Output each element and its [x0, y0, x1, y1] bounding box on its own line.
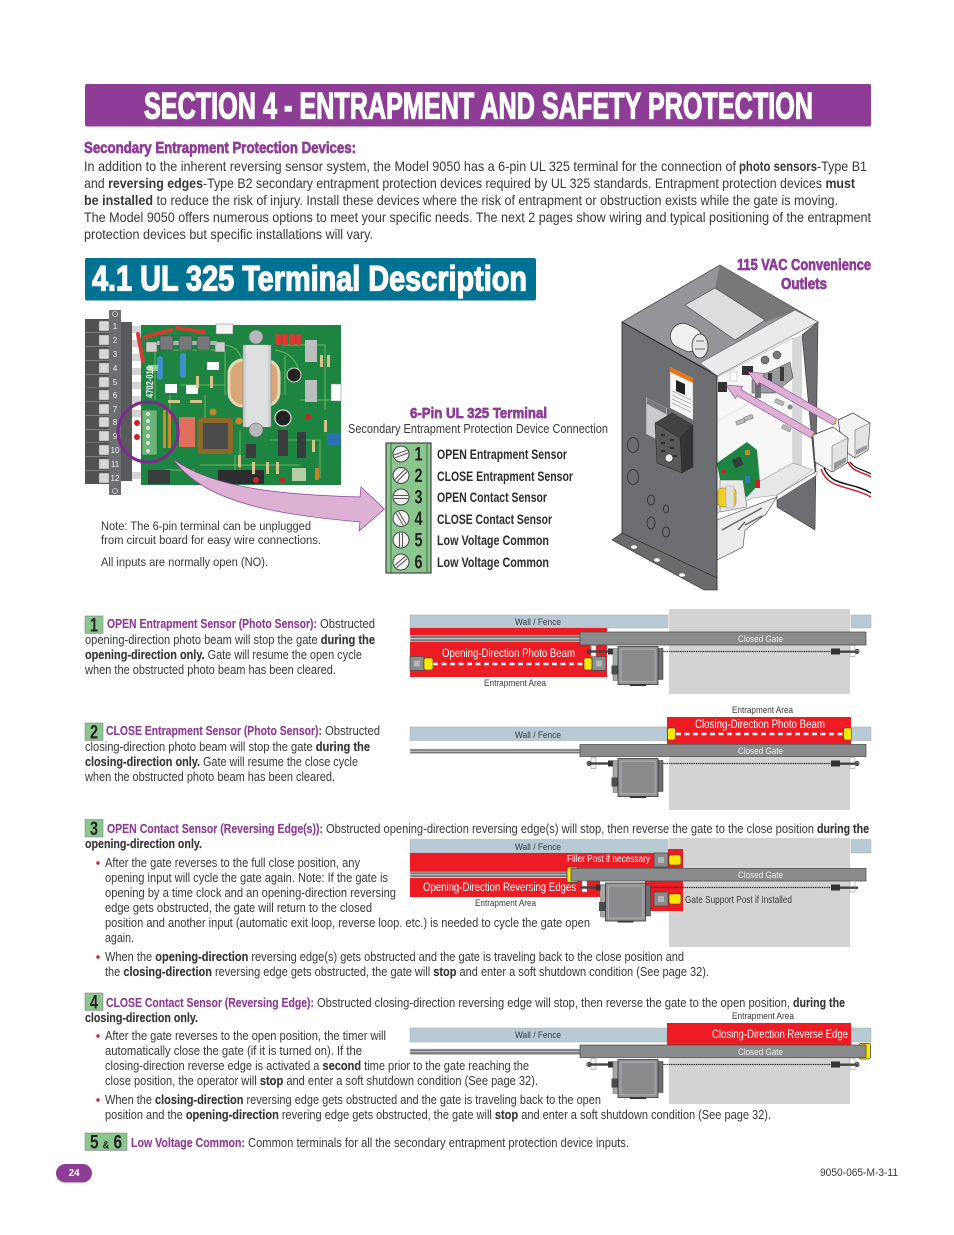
terminal labels: OPEN Contact Sensor — [437, 489, 547, 505]
entrapment area label: Entrapment Area — [475, 898, 537, 909]
section 4: close contact sensor text: position and the opening-direction revering edge gets obstructed, the gate will stop and enter a soft shutdown condition (See page 32). — [105, 1108, 771, 1122]
intro text block: protection devices but specific installations will vary. — [84, 226, 373, 242]
wall / fence — [410, 840, 871, 853]
interior white panel — [717, 338, 793, 505]
badge 1 — [85, 616, 103, 636]
note text: from circuit board for easy wire connections. — [101, 533, 321, 547]
section 3: open contact sensor text: opening input will cycle the gate again. Note: If the gate is — [105, 871, 388, 885]
badge 2 — [85, 722, 103, 744]
filler post and sensor — [654, 853, 681, 867]
badge 4: 4 — [90, 992, 98, 1014]
section 2: close entrapment sensor text: closing-direction photo beam will stop the gate during the — [85, 740, 370, 754]
wall / fence: Wall / Fence — [515, 730, 561, 741]
capacitors and resistors — [138, 324, 341, 401]
top beam — [700, 310, 818, 376]
6-pin terminal block — [386, 443, 431, 574]
badge 3: 3 — [90, 819, 98, 840]
right side panel — [777, 322, 818, 530]
badge 1: 1 — [90, 616, 98, 636]
section 3: open contact sensor text: opening-direction only. — [85, 837, 202, 851]
section 3: open contact sensor text: Obstructed opening-direction reversing edge(s) will stop, then reverse the gate to the close position — [326, 822, 814, 836]
note text — [101, 519, 321, 569]
section 2: close entrapment sensor text: Obstructed — [325, 724, 380, 738]
section 3: open contact sensor text: edge gets obstructed, the gate will return to the closed — [105, 901, 372, 915]
intro text block: -Type B1 — [817, 158, 867, 174]
support post and sensor — [654, 892, 681, 906]
reversing edge — [859, 1044, 870, 1059]
wall / fence — [410, 727, 871, 741]
heading: 115 VAC convenience outlets: 115 VAC Convenience — [737, 257, 871, 274]
section 3: open contact sensor text: during the — [817, 822, 869, 836]
terminal labels: CLOSE Contact Sensor — [437, 511, 552, 527]
section 4: close contact sensor text: during the — [793, 996, 845, 1010]
section 5 and 6: low voltage common: Common terminals for all the secondary entrapment protection device inputs. — [248, 1136, 629, 1150]
left side panel — [622, 322, 717, 590]
section 3: open contact sensor text: again. — [105, 931, 134, 945]
section 2: close entrapment sensor text — [84, 722, 380, 784]
capacitors and resistors: 4702-010 — [145, 366, 156, 398]
reversing edges label: Opening-Direction Reversing Edges — [423, 882, 576, 894]
section 4: close contact sensor text: CLOSE Contact Sensor (Reversing Edge): — [106, 996, 314, 1010]
section 3: open contact sensor text: opening by a time clock and an opening-direction reversing — [105, 886, 396, 900]
photo sensors — [668, 728, 852, 740]
closed gate — [571, 868, 866, 881]
diagram 2: closing-direction photo beam — [410, 705, 871, 810]
entrapment area label: Entrapment Area — [732, 705, 794, 716]
operator and chain — [580, 881, 858, 922]
terminal strip with 12 positions: 11 — [111, 460, 120, 469]
note text: All inputs are normally open (NO). — [101, 555, 268, 569]
section 4: close contact sensor text: After the gate reverses to the open position, the timer will — [105, 1029, 386, 1043]
terminal strip with 12 positions: 5 — [113, 378, 118, 387]
transformer — [229, 330, 279, 437]
beam label: Opening-Direction Photo Beam — [442, 648, 575, 660]
large capacitors and components — [148, 340, 341, 484]
6-pin terminal block: 4 — [414, 509, 423, 530]
knockout holes — [628, 438, 670, 537]
section 4: close contact sensor text: closing-direction reverse edge is activated a second time prior to the gate reaching the — [105, 1059, 529, 1073]
section 2: close entrapment sensor text: CLOSE Entrapment Sensor (Photo Sensor): — [106, 724, 322, 738]
green board — [141, 325, 341, 485]
section 1: open entrapment sensor text: when the obstructed photo beam has been cleared. — [84, 663, 336, 677]
section 4: close contact sensor text: When the closing-direction reversing edge gets obstructed and the gate is traveling back to the open — [105, 1093, 601, 1107]
section 2: close entrapment sensor text: closing-direction only. Gate will resume the close cycle — [85, 755, 358, 769]
reversing edge — [567, 867, 578, 882]
page number: 24 — [68, 1168, 80, 1179]
6-pin terminal block: 2 — [414, 466, 422, 487]
terminal strip with 12 positions: 12 — [111, 474, 120, 483]
reverse edge label: Closing-Direction Reverse Edge — [712, 1029, 848, 1041]
section 3: open contact sensor text: When the opening-direction reversing edge(s) gets obstructed and the gate is traveling back to the close position and — [105, 950, 684, 964]
badge 4 — [85, 992, 103, 1014]
badge 2: 2 — [90, 722, 98, 744]
floor shelf — [717, 463, 813, 513]
heading: 6-pin UL 325 terminal: 6-Pin UL 325 Terminal — [410, 405, 547, 422]
diagram 4: closing-direction reverse edge — [410, 1011, 871, 1104]
intro text block: In addition to the inherent reversing sensor system, the Model 9050 has a 6-pin UL 325 terminal for the connection of — [84, 158, 736, 174]
note text: Note: The 6-pin terminal can be unplugged — [101, 519, 311, 533]
intro text block: and reversing edges-Type B2 secondary entrapment protection devices required by UL 325 standards. Entrapment protection devices must — [84, 175, 855, 191]
operator enclosure illustration — [612, 265, 871, 590]
control box — [655, 413, 693, 473]
closed gate: Closed Gate — [738, 1047, 783, 1058]
section 1: open entrapment sensor text: opening-direction only. Gate will resume the open cycle — [85, 648, 362, 662]
section 3: open contact sensor text: position and another input (automatic exit loop, reverse loop. etc.) is needed to cycle the gate open — [105, 916, 590, 930]
terminal strip with 12 positions: 3 — [113, 350, 118, 359]
6-pin terminal block: 1 — [414, 444, 423, 466]
circuit board illustration — [85, 310, 341, 495]
section 4: close contact sensor text: closing-direction only. — [85, 1011, 198, 1025]
terminal strip with 12 positions: 6 — [113, 391, 118, 400]
arrow: board to terminal — [173, 459, 384, 531]
closed gate — [580, 632, 866, 645]
closed gate: Closed Gate — [738, 634, 783, 645]
section 4: close contact sensor text: Obstructed closing-direction reversing edge will stop, then reverse the gate to the open position, — [317, 996, 790, 1010]
heading: 115 VAC convenience outlets: Outlets — [781, 276, 827, 293]
heading: 4.1 UL 325 terminal description: 4.1 UL 325 Terminal Description — [92, 260, 527, 298]
section 1: open entrapment sensor text: opening-direction photo beam will stop the gate during the — [85, 633, 375, 647]
section 3: open contact sensor text — [85, 819, 869, 979]
section 3: open contact sensor text: the closing-direction reversing edge gets obstructed, the gate will stop and enter a soft shutdown condition (See page 32). — [105, 965, 709, 979]
intro text block: photo sensors — [739, 158, 817, 174]
6-pin terminal block: 6 — [414, 552, 422, 574]
entrapment area label: Entrapment Area — [732, 1011, 795, 1022]
closed gate: Closed Gate — [738, 746, 783, 757]
terminal strip with 12 positions: 10 — [111, 446, 120, 455]
section 5 and 6: low voltage common — [85, 1132, 629, 1154]
operator and chain — [587, 646, 859, 686]
wall / fence — [410, 615, 871, 628]
open top and back wall — [622, 265, 818, 375]
operator and chain — [587, 758, 859, 798]
motor — [666, 319, 708, 358]
terminal strip with 12 positions — [85, 310, 132, 495]
section 1: open entrapment sensor text: OPEN Entrapment Sensor (Photo Sensor): — [107, 617, 317, 631]
terminal strip with 12 positions: 9 — [113, 432, 118, 441]
intro text block: The Model 9050 offers numerous options to meet your specific needs. The next 2 pages show wiring and typical positioning of the entrapment — [84, 209, 871, 225]
bottom chute — [717, 497, 777, 560]
page number — [56, 1164, 92, 1182]
terminal strip with 12 positions: 4 — [113, 364, 118, 373]
closed gate: Closed Gate — [738, 870, 783, 881]
terminal strip with 12 positions: 2 — [113, 336, 118, 345]
entrapment area label: Entrapment Area — [484, 678, 547, 689]
6-pin terminal block: 3 — [414, 488, 422, 508]
intro text block: be installed to reduce the risk of injury. Install these devices where the risk of entrapment or obstruction exists while the gate is moving. — [84, 192, 838, 208]
intro text block — [84, 158, 871, 242]
terminal strip with 12 positions: 8 — [113, 418, 118, 427]
section 1: open entrapment sensor text: Obstructed — [320, 617, 375, 631]
terminal labels: Low Voltage Common — [437, 554, 549, 570]
subheading: device connection: Secondary Entrapment Protection Device Connection — [348, 421, 608, 436]
pink outlet arrows — [726, 372, 837, 438]
magnified circle on 6-pin terminal — [118, 402, 178, 462]
terminal labels: Low Voltage Common — [437, 532, 549, 548]
wall / fence: Wall / Fence — [515, 842, 561, 853]
terminal strip with 12 positions: 7 — [113, 405, 118, 414]
heading: 115 VAC convenience outlets — [737, 257, 871, 293]
wall / fence: Wall / Fence — [515, 617, 561, 628]
section 4: close contact sensor text: automatically close the gate (if it is turned on). If the — [105, 1044, 362, 1058]
section 4: close contact sensor text — [85, 992, 845, 1122]
section 3: open contact sensor text: OPEN Contact Sensor (Reversing Edge(s)): — [107, 822, 323, 836]
terminal strip with 12 positions: 1 — [113, 322, 118, 331]
closed gate — [580, 744, 866, 757]
terminal labels: OPEN Entrapment Sensor — [437, 446, 567, 462]
operator and chain — [587, 1058, 859, 1099]
photo sensors — [410, 656, 606, 670]
6-pin terminal block: 5 — [414, 530, 423, 552]
section 2: close entrapment sensor text: when the obstructed photo beam has been cleared. — [84, 770, 335, 784]
document code: 9050-065-M-3-11 — [820, 1167, 898, 1179]
closed gate — [580, 1045, 866, 1058]
section 1: open entrapment sensor text — [84, 616, 375, 677]
terminal strips and fittings — [718, 351, 793, 432]
outlet boxes with cables — [813, 413, 871, 497]
gate support post label: Gate Support Post if Installed — [685, 895, 792, 906]
section 3: open contact sensor text: After the gate reverses to the full close position, any — [105, 856, 361, 870]
small circuit board and transformer — [717, 442, 760, 512]
wall / fence: Wall / Fence — [515, 1030, 561, 1041]
yellow connector dots — [812, 422, 836, 436]
diagram 1: opening-direction photo beam — [410, 609, 871, 694]
badge 5 & 6: 5 & 6 — [90, 1132, 122, 1154]
diagram 3: opening-direction reversing edges — [410, 838, 871, 947]
terminal labels — [437, 446, 573, 570]
badge 3 — [85, 819, 103, 840]
beam label: Closing-Direction Photo Beam — [695, 719, 825, 731]
section 4: close contact sensor text: close position, the operator will stop and enter a soft shutdown condition (See page 32). — [105, 1074, 538, 1088]
section 5 and 6: low voltage common: Low Voltage Common: — [131, 1136, 245, 1150]
filler post label: Filler Post if necessary — [567, 854, 650, 865]
heading: secondary entrapment protection devices: Secondary Entrapment Protection Devices: — [84, 140, 356, 157]
terminal labels: CLOSE Entrapment Sensor — [437, 468, 573, 484]
warning label — [646, 367, 693, 445]
base flange — [612, 533, 717, 590]
wall / fence — [410, 1028, 871, 1042]
